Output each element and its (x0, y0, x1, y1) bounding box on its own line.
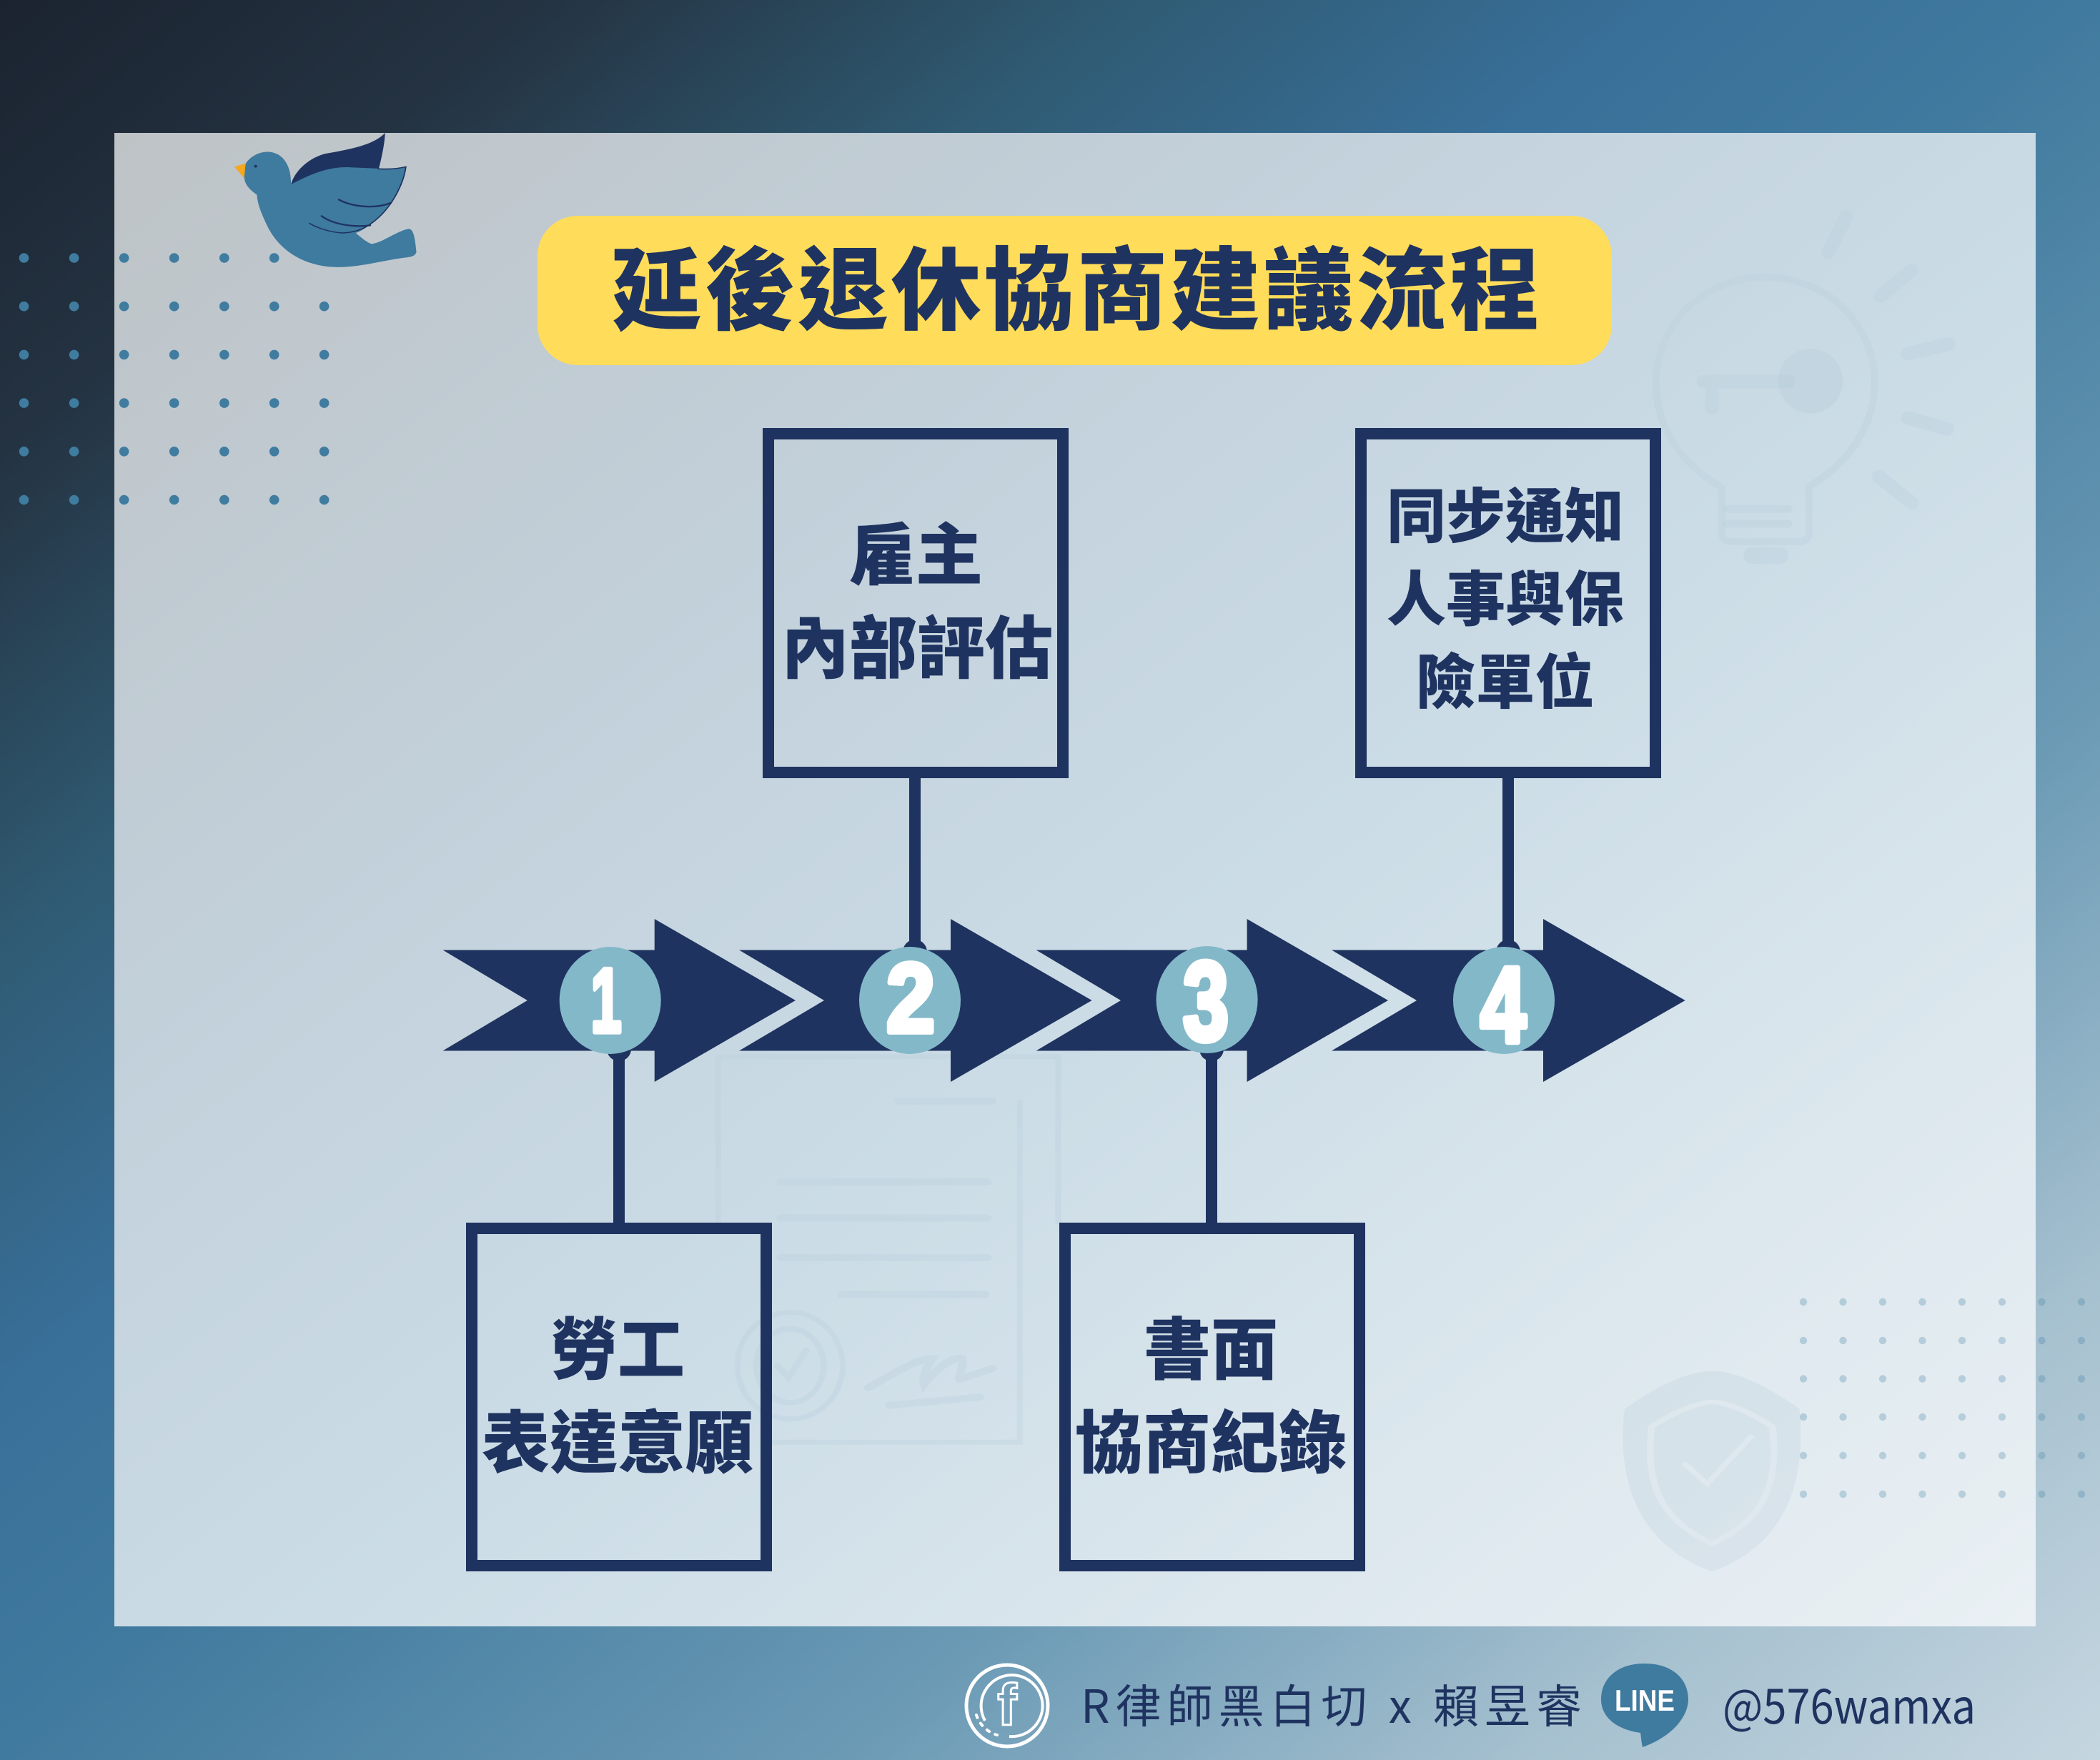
step 4 marker (1453, 945, 1555, 1065)
icon: facebook (966, 1665, 1048, 1746)
decoration: dot grid top left (19, 253, 329, 504)
box: 勞工表達意願: 勞工 (550, 1313, 685, 1388)
icon: facebook: f (997, 1673, 1017, 1738)
step 3 marker (1157, 940, 1258, 1064)
connector: step 4 (1496, 772, 1520, 964)
step 1 marker (560, 947, 661, 1054)
box: 雇主內部評估: 內部評估 (781, 612, 1053, 687)
box: 同步通知人事與保險單位: 人事與保 (1387, 567, 1624, 633)
panel: main content (114, 133, 2036, 1626)
box: 同步通知人事與保險單位: 同步通知 (1387, 484, 1624, 550)
icon: LINE (1601, 1664, 1688, 1747)
icon: bird (234, 133, 417, 267)
box: 勞工表達意願 (472, 1228, 766, 1566)
step 2 marker (859, 943, 961, 1054)
watermark: shield (1623, 1371, 1801, 1571)
step 4 marker: 4 (1480, 945, 1526, 1065)
step 3 marker: 3 (1183, 940, 1229, 1064)
box: 書面協商紀錄: 協商紀錄 (1075, 1406, 1347, 1482)
box: 同步通知人事與保險單位 (1361, 434, 1655, 772)
box: 書面協商紀錄: 書面 (1144, 1313, 1278, 1388)
connector: step 2 (903, 772, 927, 964)
arrow chain (443, 919, 1685, 1082)
title: 延後退休協商建議流程 (612, 241, 1540, 342)
footer name: R律師黑白切 x 賴昱睿 (1081, 1671, 1582, 1736)
box: 同步通知人事與保險單位: 險單位 (1417, 650, 1594, 716)
box: 雇主內部評估 (768, 434, 1063, 772)
box: 雇主內部評估: 雇主 (848, 518, 983, 593)
box: 書面協商紀錄 (1065, 1228, 1359, 1566)
title (538, 216, 1612, 365)
watermark: document (718, 1057, 1058, 1442)
icon: LINE: LINE (1615, 1684, 1675, 1717)
watermark: light bulb (1656, 217, 1948, 555)
step 2 marker: 2 (886, 943, 935, 1053)
step 1 marker: 1 (590, 950, 622, 1052)
connector: step 1 (607, 1037, 631, 1229)
connector: step 3 (1199, 1037, 1224, 1229)
footer LINE id: @576wamxa (1723, 1669, 1976, 1738)
decoration: dot grid bottom right (1800, 1298, 2085, 1498)
box: 勞工表達意願: 表達意願 (482, 1406, 753, 1482)
